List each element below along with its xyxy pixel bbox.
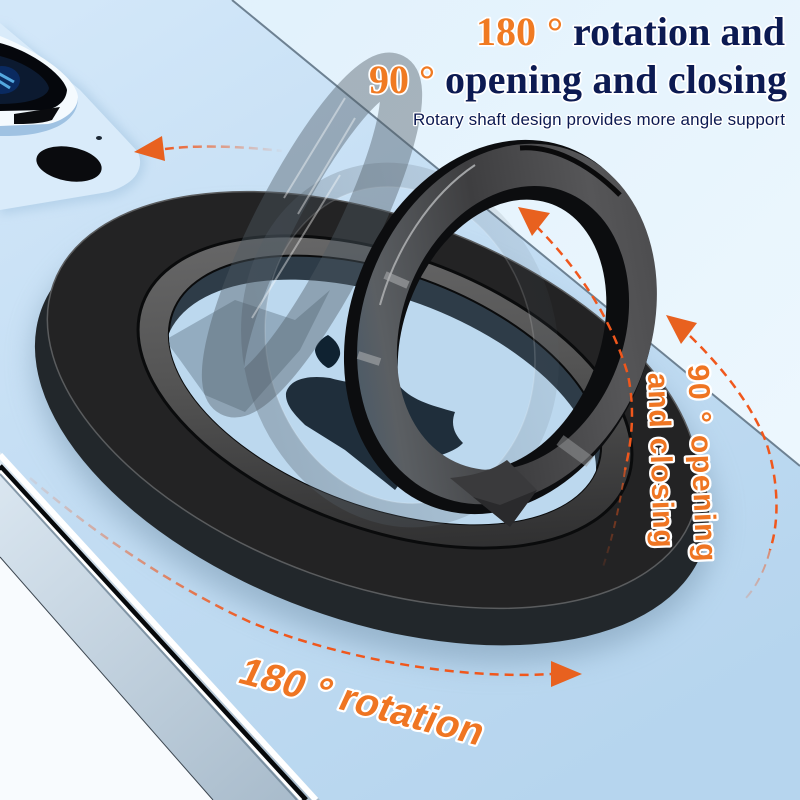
title line 2: °	[419, 57, 435, 102]
magnetic disc	[34, 190, 710, 646]
ring hinge base	[450, 460, 537, 527]
ring dark wall	[344, 140, 653, 514]
metal kickstand ring	[344, 140, 657, 526]
arrow: inner opening	[518, 207, 632, 570]
microphone dot	[96, 136, 102, 140]
transparent centre hole	[133, 203, 637, 577]
subtitle: Rotary shaft design provides more angle support	[413, 110, 785, 129]
title	[369, 9, 787, 129]
label: 180 rotation: 180 ° rotation	[232, 650, 493, 754]
inner grey ring	[96, 175, 674, 609]
ring flat face	[357, 144, 657, 504]
title line 1: °	[547, 9, 563, 54]
ghost translucent ring: open position	[215, 141, 585, 549]
lower-left desk area	[0, 540, 240, 800]
arrow: bottom rotation	[30, 478, 582, 687]
disc side wall	[0, 131, 768, 729]
disc shadow	[0, 131, 777, 749]
apple logo	[286, 335, 463, 490]
disc top face	[0, 111, 755, 689]
arrow: top-left rotation	[134, 136, 282, 161]
arrow: outer opening	[666, 315, 776, 602]
label: 90 opening: 90 ° opening	[681, 364, 723, 562]
label: and closing: and closing	[641, 372, 680, 548]
title line 1: 180	[476, 9, 536, 54]
camera flash	[34, 142, 104, 186]
phone side edge	[0, 452, 320, 800]
hinge mechanism seen through hole	[165, 290, 330, 412]
camera lens	[0, 36, 78, 136]
title line 2: opening and closing	[445, 57, 787, 102]
title line 1: rotation and	[573, 9, 785, 54]
light view through hole	[168, 280, 596, 524]
ghost translucent ring: edge-on position	[195, 56, 429, 414]
title line 2: 90	[369, 57, 409, 102]
camera plateau	[0, 23, 145, 215]
